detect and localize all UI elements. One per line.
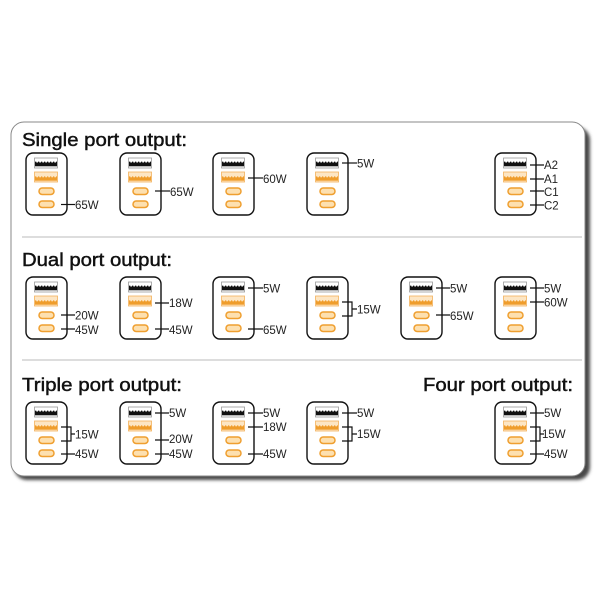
- charger: triple 5W bracket 15W: 5W: [357, 408, 374, 420]
- charger: triple bracket 15W 45W: 45W: [75, 449, 99, 461]
- charger: dual 5W 60W: 5W: [544, 284, 561, 296]
- heading: dual port: Dual port output:: [22, 249, 172, 270]
- heading: single port: Single port output:: [22, 129, 187, 150]
- charger: dual 18W 45W: 18W: [169, 298, 193, 310]
- charger: dual 5W 60W: 60W: [544, 298, 568, 310]
- charger: triple 5W bracket 15W: [307, 402, 381, 464]
- charger: dual 18W 45W: 45W: [169, 325, 193, 337]
- charger: triple 5W 20W 45W: 5W: [169, 408, 186, 420]
- charger: triple 5W 18W 45W: 18W: [263, 422, 287, 434]
- charger: dual 20W 45W: 20W: [75, 310, 99, 322]
- charger: dual 5W 65W C1: [401, 277, 474, 339]
- charger: triple bracket 15W 45W: 15W: [75, 430, 99, 442]
- charger: port key: A1: [544, 174, 558, 186]
- charger: dual 20W 45W: [26, 277, 99, 339]
- charger: single A2 5W: 5W: [357, 158, 374, 170]
- charger: single C1 65W: 65W: [170, 187, 194, 199]
- charger: dual 18W 45W: [120, 277, 193, 339]
- charger: port key: C2: [544, 200, 559, 212]
- charger: port key: [495, 153, 559, 215]
- charger: dual 20W 45W: 45W: [75, 325, 99, 337]
- charger: triple bracket 15W 45W: [26, 402, 99, 464]
- panel: card: [11, 122, 590, 480]
- heading: triple port: Triple port output:: [22, 374, 182, 395]
- charger: triple 5W bracket 15W: 15W: [357, 429, 381, 441]
- charger: single A1 60W: 60W: [263, 174, 287, 186]
- charger: triple 5W 20W 45W: [120, 402, 193, 464]
- charger: single A2 5W: [307, 153, 374, 215]
- charger: single C2 65W: [26, 153, 99, 215]
- charger: triple 5W 18W 45W: 5W: [263, 408, 280, 420]
- charger: port key: A2: [544, 160, 558, 172]
- charger: triple 5W 18W 45W: 45W: [263, 449, 287, 461]
- charger: dual 5W 60W: [495, 277, 568, 339]
- charger: four port 5W 15W 45W: 15W: [542, 429, 566, 441]
- charger: dual 5W 65W C1: 5W: [450, 284, 467, 296]
- charger: triple 5W 18W 45W: [213, 402, 287, 464]
- charger: dual 5W 65W: [213, 277, 287, 339]
- charger: dual 5W 65W C1: 65W: [450, 311, 474, 323]
- heading: four port: Four port output:: [423, 374, 573, 395]
- charger: single A1 60W: [213, 153, 287, 215]
- charger: single C2 65W: 65W: [75, 200, 99, 212]
- charger: dual 5W 65W: 5W: [263, 284, 280, 296]
- charger: dual 5W 65W: 65W: [263, 325, 287, 337]
- charger: triple 5W 20W 45W: 20W: [169, 434, 193, 446]
- charger: triple 5W 20W 45W: 45W: [169, 449, 193, 461]
- charger: dual bracket 15W: 15W: [357, 304, 381, 316]
- charger: four port 5W 15W 45W: 5W: [544, 408, 561, 420]
- charger: single C1 65W: [120, 153, 194, 215]
- charger: four port 5W 15W 45W: 45W: [544, 449, 568, 461]
- charger: port key: C1: [544, 187, 559, 199]
- charger: dual bracket 15W: [307, 277, 381, 339]
- charger: four port 5W 15W 45W: [495, 402, 568, 464]
